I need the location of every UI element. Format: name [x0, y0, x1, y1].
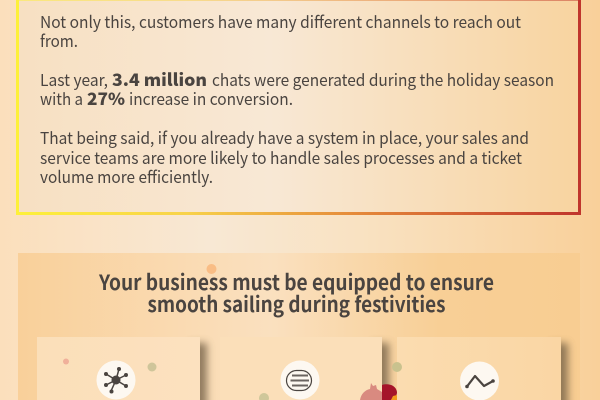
text block: channels: [40, 9, 521, 52]
text block: sales and service: volume more efficiently.: [40, 164, 213, 188]
panel: text box with gradient border: [18, 0, 580, 214]
icon: menu: [280, 360, 320, 400]
text block: channels: from.: [40, 28, 78, 52]
dot: green: [259, 393, 269, 400]
text block: holiday chats: increase in conversion.: [129, 86, 293, 110]
dot: pink: [63, 358, 69, 364]
text block: sales and service: [40, 125, 529, 188]
text block: sales and service: service teams are more likely to handle sales processes and a ticket: [40, 145, 522, 169]
card 1: [37, 337, 207, 400]
text block: channels: Not only this, customers have many different channels to reach out: [40, 9, 521, 33]
dot: green: [148, 362, 156, 372]
card 3: [397, 337, 568, 400]
text block: holiday chats: [40, 66, 554, 110]
text block: holiday chats: chats were generated during the holiday season: [212, 67, 554, 91]
dot: green on card 3 edge: [392, 362, 402, 372]
text block: holiday chats: with a: [40, 86, 83, 110]
text block: sales and service: That being said, if you already have a system in place, your sales and: [40, 125, 529, 149]
text block: holiday chats: 27%: [87, 85, 125, 110]
icon: pomegranate: [360, 383, 397, 400]
heading: [98, 267, 494, 319]
heading: Your business must be equipped to ensure: [98, 267, 494, 297]
heading: smooth sailing during festivities: [148, 289, 446, 319]
panel: equipped section: [18, 253, 580, 400]
card 2: [220, 337, 397, 400]
text block: holiday chats: Last year,: [40, 67, 108, 91]
icon: network: [96, 360, 136, 400]
text block: holiday chats: 3.4 million: [112, 66, 207, 91]
icon: line chart: [460, 362, 499, 400]
decorative dot: orange: [206, 264, 216, 274]
